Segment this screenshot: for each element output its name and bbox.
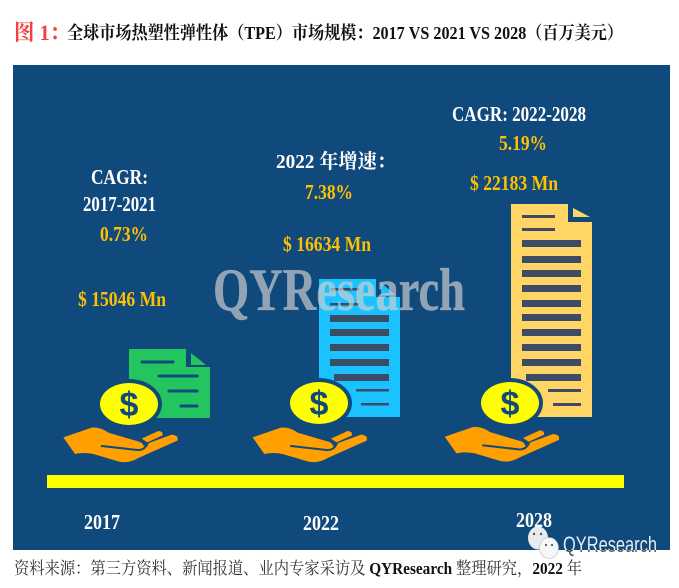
title: 全球市场热塑性弹性体（TPE）市场规模：2017 VS 2021 VS 2028（百万美元） (67, 22, 623, 43)
labels: 2017: $ 15046 Mn (78, 287, 166, 311)
labels: 2022 (276, 149, 396, 256)
year labels: 2022 (303, 511, 339, 535)
labels: 2028: $ 22183 Mn (470, 171, 558, 195)
labels: 2017: 0.73% (100, 222, 148, 246)
icon: 2017 coin and hand (63, 379, 178, 462)
year labels (84, 508, 552, 535)
labels: 2017: 2017-2021 (83, 192, 156, 216)
labels: 2022: 7.38% (305, 180, 353, 204)
title (14, 20, 623, 45)
labels: 2022: $ 16634 Mn (283, 232, 371, 256)
year labels: 2028 (516, 508, 552, 532)
title: 图 1： (14, 20, 70, 45)
labels: 2028 (452, 102, 586, 195)
source note: 资料来源：第三方资料、新闻报道、业内专家采访及 QYResearch 整理研究，2022 年 (14, 558, 582, 578)
icon: 2028 yellow document (511, 204, 592, 417)
labels: 2028: CAGR: 2022-2028 (452, 102, 586, 126)
wechat logo watermark (528, 526, 657, 558)
labels: 2022: 2022 年增速： (276, 149, 396, 173)
icon: 2022 coin and hand (253, 378, 367, 462)
icon: 2017 green document (129, 349, 210, 418)
icon: 2022 blue document (319, 279, 400, 417)
year labels: 2017 (84, 510, 120, 534)
labels: 2017 (78, 165, 166, 311)
watermark: QYResearch: QYResearch (213, 257, 465, 323)
labels: 2028: 5.19% (499, 131, 547, 155)
panel: market size background (13, 65, 670, 550)
labels: 2017: CAGR: (91, 165, 148, 189)
axis bar (47, 475, 624, 488)
icon: 2028 coin and hand (445, 378, 559, 462)
